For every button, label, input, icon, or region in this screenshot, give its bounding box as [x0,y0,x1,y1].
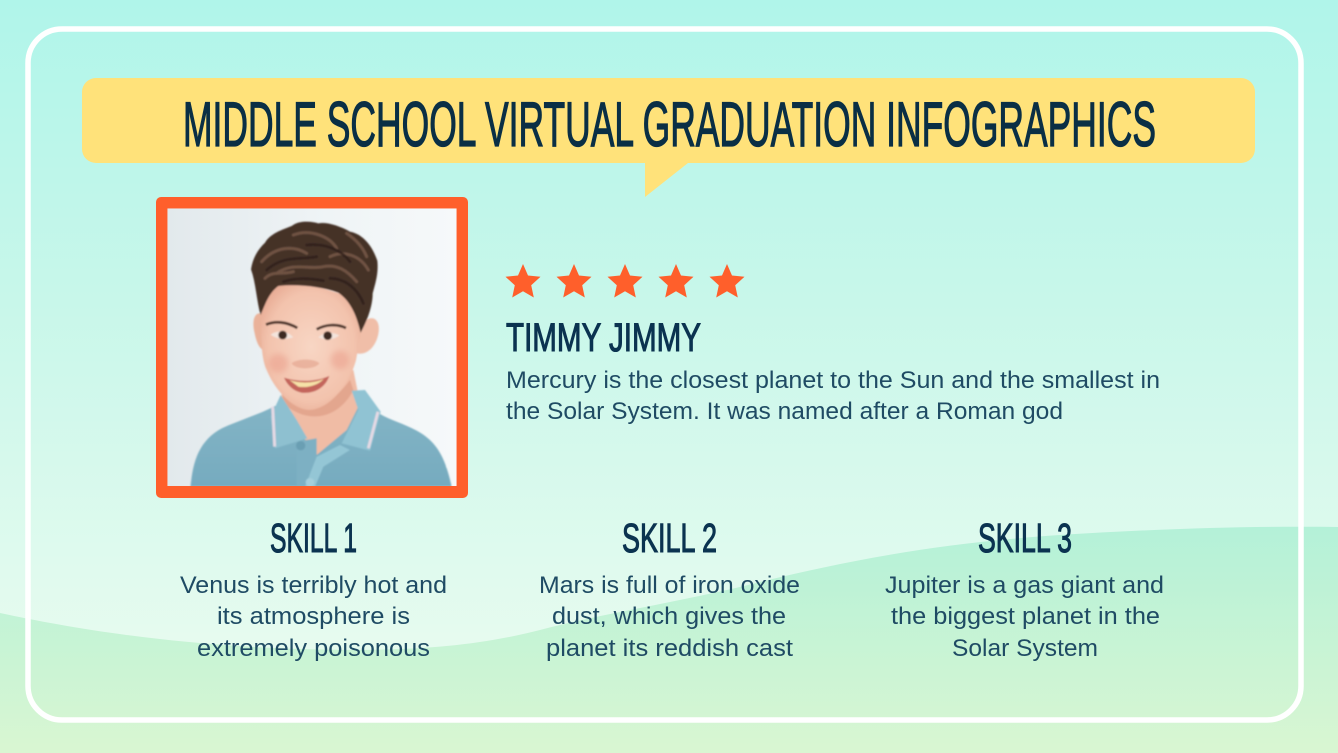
skill 1 column [180,515,447,662]
left ear [253,313,265,350]
skill 3 text: Solar System [952,635,1098,662]
skill 3 text: Jupiter is a gas giant and [885,572,1164,599]
neck [281,370,360,455]
skill 1 text [180,572,447,662]
shirt body [191,398,452,487]
left collar [271,395,307,448]
nose [292,360,319,368]
orange photo frame [156,197,468,498]
hair shadow strands [267,245,363,303]
banner speech bubble [82,78,1255,197]
five star rating [506,264,744,298]
skill 1 text: Venus is terribly hot and [180,572,447,599]
skill 1 heading: SKILL 1 [270,515,357,561]
student description: the Solar System. It was named after a Roman god [506,398,1063,425]
left eye [271,331,293,339]
skill 2 text [539,572,800,662]
skill 2 heading: SKILL 2 [622,515,717,561]
title banner [82,78,1255,197]
left eyebrow [266,322,297,328]
placket [304,438,318,456]
cheek blush [268,351,349,373]
collar stripes [273,407,378,448]
skill 3 text [885,572,1164,662]
skill 2 text: dust, which gives the [552,603,786,630]
student description [506,367,1160,425]
student description: Mercury is the closest planet to the Sun and the smallest in [506,367,1160,394]
skill 1 text: extremely poisonous [197,635,430,662]
hair [251,222,378,333]
profile section [506,264,1160,425]
right ear [357,318,379,354]
right eye [318,331,339,340]
skill 3 column [885,515,1164,662]
skill 2 column [539,515,800,662]
shirt buttons [296,441,305,450]
right collar [342,390,381,451]
hair highlights [262,233,368,282]
skill 3 text: the biggest planet in the [891,603,1160,630]
portrait of smiling boy [167,208,457,487]
skill 1 text: its atmosphere is [217,603,410,630]
right eyebrow [317,325,346,329]
face [261,283,361,410]
background wave [0,527,1338,753]
skill 2 text: planet its reddish cast [546,635,793,662]
photo panel [156,197,468,498]
mouth [284,376,329,393]
neck shadow [282,380,353,416]
skill 2 text: Mars is full of iron oxide [539,572,800,599]
teeth [289,379,324,387]
student name: TIMMY JIMMY [506,316,701,360]
skill 3 heading: SKILL 3 [978,515,1072,561]
